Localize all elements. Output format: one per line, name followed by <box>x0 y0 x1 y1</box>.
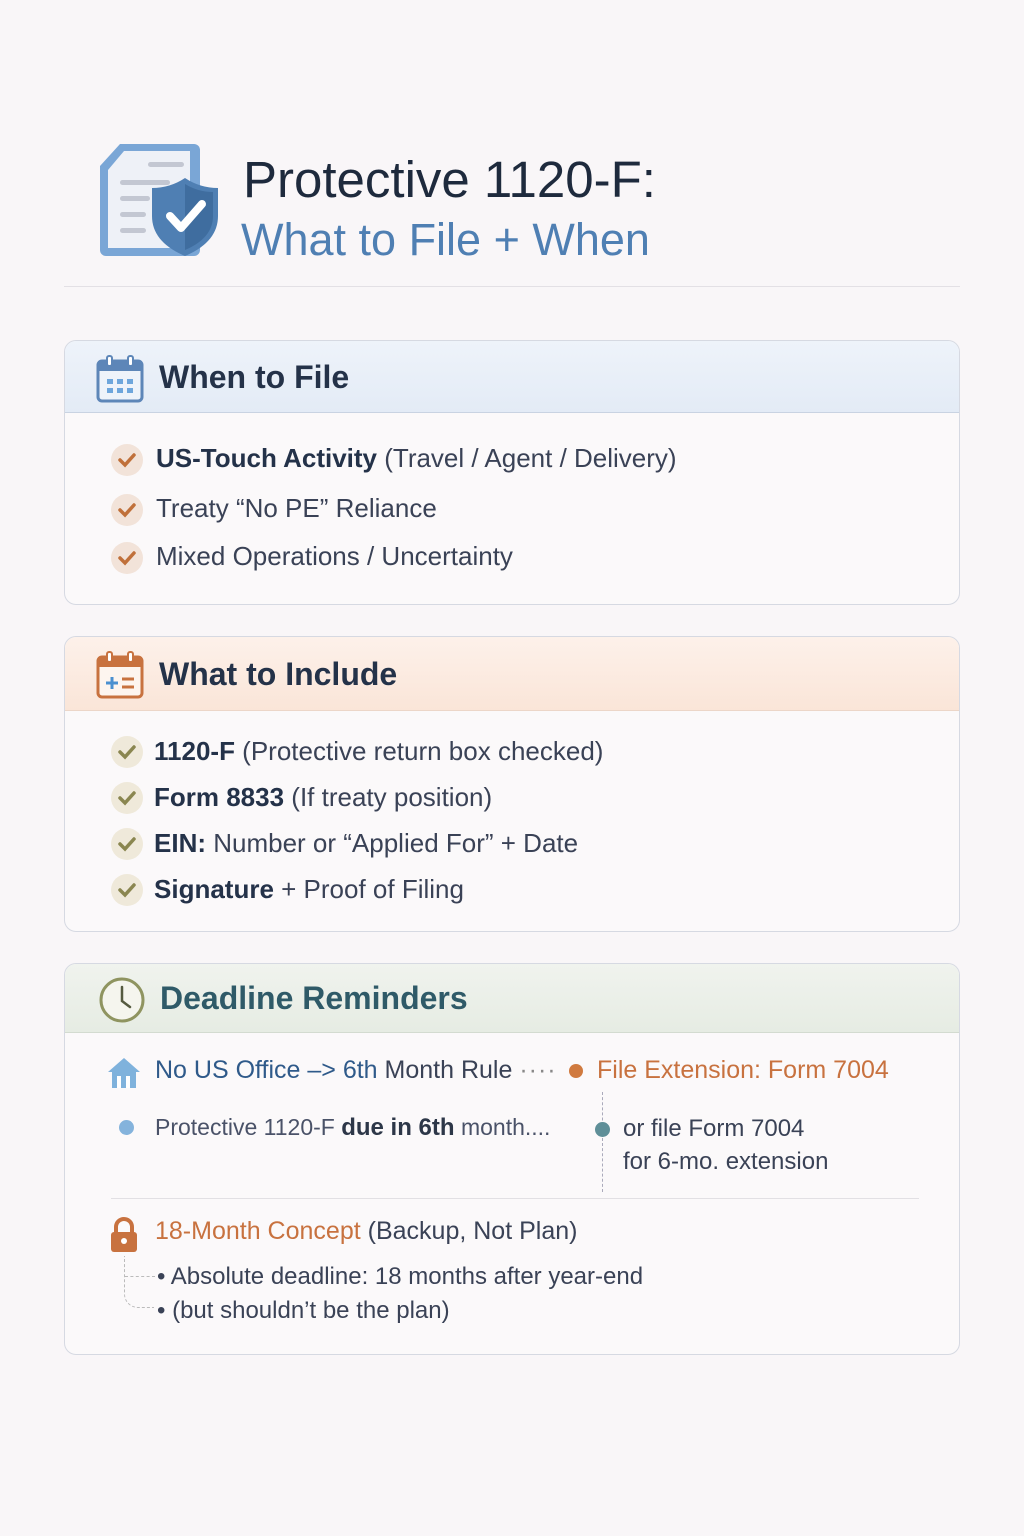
list: when to file items <box>111 443 677 574</box>
list: include items: Form 8833 (If treaty position) <box>154 782 492 812</box>
icon: calendar <box>96 355 144 402</box>
icon: calendar plus <box>96 651 144 698</box>
text: or file form 7004: for 6-mo. extension <box>623 1148 828 1175</box>
text: protective due: Protective 1120-F due in 6th month.... <box>155 1114 550 1141</box>
list: include items: EIN: Number or “Applied For” + Date <box>154 828 578 858</box>
text: absolute deadline: • (but shouldn’t be the plan) <box>157 1297 450 1324</box>
text: absolute deadline: • Absolute deadline: 18 months after year-end <box>157 1263 643 1290</box>
text: or file form 7004: or file Form 7004 <box>623 1115 804 1142</box>
icon: document with shield <box>100 144 218 256</box>
dot: teal <box>595 1122 610 1137</box>
panel: what to include <box>64 636 960 932</box>
panel: when to file <box>64 340 960 605</box>
header: deadline reminders: Deadline Reminders <box>160 980 468 1016</box>
text: or file form 7004 <box>623 1115 828 1175</box>
text: no US office rule: No US Office –> 6th Month Rule ···· <box>155 1056 557 1084</box>
list: when to file items: Treaty “No PE” Reliance <box>156 493 437 523</box>
icon: clock <box>100 978 144 1022</box>
text: absolute deadline <box>157 1263 643 1324</box>
header: what to include: What to Include <box>159 656 397 692</box>
list: include items <box>111 736 603 906</box>
panel: deadline reminders <box>64 963 960 1355</box>
subtitle: What to File + When <box>241 214 650 265</box>
header: what to include <box>65 637 959 711</box>
header: when to file <box>65 341 959 413</box>
list: include items: 1120-F (Protective return box checked) <box>154 736 603 766</box>
title: Protective 1120-F: <box>243 151 656 208</box>
icon: house <box>108 1058 140 1088</box>
list: include items: Signature + Proof of Filing <box>154 874 464 904</box>
dot: blue <box>119 1120 134 1135</box>
list: when to file items: Mixed Operations / Uncertainty <box>156 541 513 571</box>
dot: orange <box>569 1064 583 1078</box>
icon: lock <box>111 1217 137 1252</box>
list: when to file items: US-Touch Activity (Travel / Agent / Delivery) <box>156 443 677 473</box>
header: when to file: When to File <box>159 359 349 395</box>
header: deadline reminders <box>65 964 959 1033</box>
text: file extension: File Extension: Form 7004 <box>597 1056 889 1084</box>
text: 18-month concept: 18-Month Concept (Backup, Not Plan) <box>155 1217 577 1245</box>
